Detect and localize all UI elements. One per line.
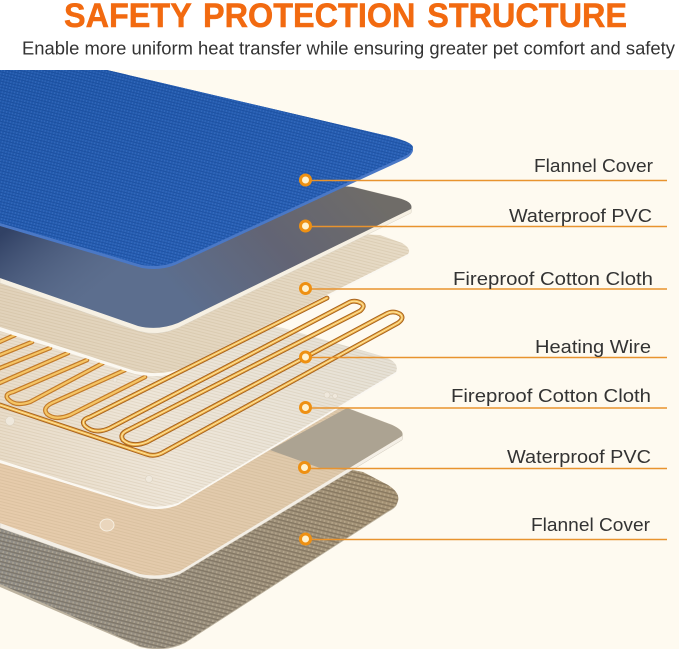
callout: Fireproof Cotton Cloth (bottom): Fireproof Cotton Cloth [451, 386, 651, 406]
callout: Fireproof Cotton Cloth (bottom) [300, 386, 667, 412]
heating wire: arms under the cloth [0, 335, 145, 418]
callout: Waterproof PVC (top): Waterproof PVC [509, 206, 652, 226]
water drop [100, 519, 114, 531]
layer: lower fireproof cotton cloth [0, 280, 397, 509]
callout: Flannel Cover (top) [300, 156, 667, 185]
callout: Heating Wire [300, 337, 667, 362]
water drops [6, 378, 338, 482]
heating wire: long serpentine [0, 298, 402, 455]
callout: Waterproof PVC (top) [300, 206, 667, 231]
callout: Heating Wire: Heating Wire [535, 337, 651, 357]
callout: Fireproof Cotton Cloth (top): Fireproof Cotton Cloth [453, 269, 653, 289]
subtitle: Enable more uniform heat transfer while ensuring greater pet comfort and safety [22, 38, 675, 58]
callout: Waterproof PVC (bottom) [300, 447, 667, 472]
grey shaded corner [270, 408, 403, 470]
layer: upper fireproof cotton cloth [0, 220, 409, 376]
layer: lower waterproof PVC [0, 360, 403, 579]
callout: Flannel Cover (bottom) [300, 515, 667, 544]
callout: Flannel Cover (top): Flannel Cover [534, 156, 653, 176]
layer: bottom flannel cover [0, 400, 398, 649]
callout: Flannel Cover (bottom): Flannel Cover [531, 515, 650, 535]
layer: blue flannel cover [0, 70, 413, 269]
callout: Waterproof PVC (bottom): Waterproof PVC [507, 447, 651, 467]
callout: Fireproof Cotton Cloth (top) [300, 269, 667, 294]
layer: upper waterproof PVC [0, 160, 411, 333]
